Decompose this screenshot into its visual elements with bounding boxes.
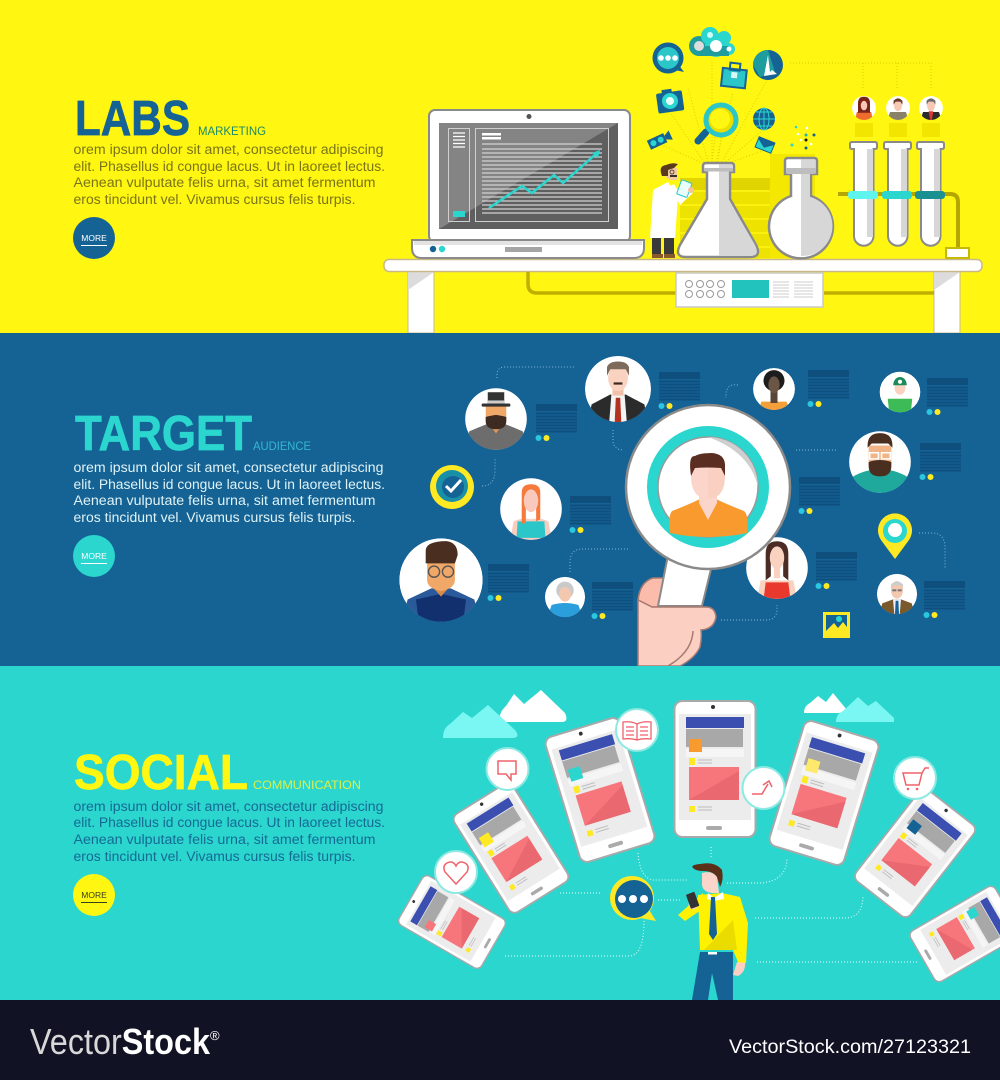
panel: target [0,333,1000,666]
icon: magnifier [698,105,736,141]
scientist [650,163,694,258]
icon: cloud [689,27,735,57]
clouds left [443,690,566,738]
text block: social body: orem ipsum dolor sit amet, consectetur adipiscing [74,799,384,814]
test tube: middle [882,142,912,246]
device under table [528,272,934,307]
icon: chat bubble [652,42,684,74]
avatar: lab suit man [919,96,943,120]
text block: target body: orem ipsum dolor sit amet, consectetur adipiscing [74,460,384,475]
dotted connectors [482,367,945,620]
registered mark: ® [210,1028,220,1043]
icon: globe [753,108,775,130]
dotted connectors [505,847,917,962]
dotted lines above avatars [790,63,931,88]
icon: compass [753,50,783,80]
avatar: red hair woman [500,478,562,540]
back finger [638,578,664,607]
text block: target body: Aenean vulputate felis urna, sit amet fermentum [74,493,376,508]
line chart: rising trend [489,153,597,208]
phone: centre [674,701,756,837]
logo: VectorStock: VectorStock [30,1021,211,1062]
icon: image [823,612,850,638]
icon: check badge [430,465,474,509]
conical flask [678,163,758,257]
collar [707,892,724,901]
phone: mid left [544,716,656,864]
panel: labs [0,0,1000,333]
pipe to test tubes [838,194,969,258]
text block: labs body: elit. Phasellus id congue lacus. Ut in laoreet lectus. [74,159,385,174]
info blocks [488,370,968,619]
avatar: woman in red [746,537,808,599]
panel background: yellow [0,0,1000,333]
tie [709,897,717,940]
button: more: MORE [81,890,107,900]
heading: LABS: LABS [75,92,190,146]
clouds right [804,693,894,722]
text block: social body [74,799,385,864]
trousers [692,952,733,1000]
avatar: lab man [886,96,910,120]
shirt [698,893,748,963]
businessman [678,863,748,1000]
heading: TARGET: TARGET [75,407,252,461]
thumb crease [668,631,693,666]
sparkle dots [790,126,816,150]
phone: far left [397,874,507,970]
text block: labs body: Aenean vulputate felis urna, sit amet fermentum [74,175,376,190]
subheading: communication: COMMUNICATION [253,778,361,792]
button: more: MORE [81,551,107,561]
test tube: right [915,142,945,246]
icon badge: book [616,709,658,751]
label shadows under avatars [855,123,940,137]
icon badge: comment [486,748,528,790]
avatar: bearded man with glasses [849,431,911,493]
panel background: blue [0,333,1000,666]
icon: envelope [754,136,776,154]
text block: labs body: orem ipsum dolor sit amet, consectetur adipiscing [74,142,384,157]
background stack behind flasks [680,154,815,258]
magnifier handle [658,555,712,606]
neck and face [702,872,719,893]
right hand [733,962,745,976]
test tube: left [848,142,878,246]
avatar: green cap [880,372,920,412]
button: more [73,874,115,916]
hair [692,863,723,887]
icon: map pin [878,513,912,559]
subheading: marketing: MARKETING [198,124,266,138]
avatar: old man [877,574,917,614]
subheading: audience: AUDIENCE [253,439,311,453]
button: more [73,217,115,259]
avatar: man in hat [465,388,527,450]
heading: SOCIAL: SOCIAL [74,746,248,800]
dotted rays [660,60,767,162]
text block: target body: elit. Phasellus id congue lacus. Ut in laoreet lectus. [74,477,385,492]
table [384,260,982,333]
button: more: MORE [81,233,107,243]
speech bubble [610,876,656,921]
image id: VectorStock.com/27123321 [729,1037,971,1058]
text block: social body: eros tincidunt vel. Vivamus cursus felis turpis. [74,849,356,864]
phone: far right [908,884,1000,984]
icon badge: cart [894,757,936,799]
icon: camera [655,87,684,114]
icon: briefcase [720,62,748,89]
avatar: afro woman [753,368,795,410]
hand [638,600,716,666]
magnifier with hand [626,405,790,666]
icon badge: heart [435,851,477,893]
text block: social body: elit. Phasellus id congue lacus. Ut in laoreet lectus. [74,815,385,830]
avatar: man in suit [585,356,651,422]
avatar: big man with glasses [399,538,483,622]
icon: video camera [647,131,673,150]
text block: target body [74,460,385,525]
avatar: lab woman [852,96,876,120]
avatar: old lady [545,577,585,617]
panel: social [0,666,1000,1000]
button: more [73,535,115,577]
text block: target body: eros tincidunt vel. Vivamus cursus felis turpis. [74,510,356,525]
panel background: teal [0,666,1000,1000]
laptop [412,110,644,258]
text block: social body: Aenean vulputate felis urna, sit amet fermentum [74,832,376,847]
round flask [769,158,833,258]
text block: labs body [74,142,385,207]
centre portrait [669,453,748,537]
text block: labs body: eros tincidunt vel. Vivamus cursus felis turpis. [74,192,356,207]
phone: right [852,786,978,920]
icon badge: share arrow [742,767,784,809]
phone: mid right [768,719,880,867]
left hand and phone [688,900,698,910]
phone: left [451,781,571,915]
footer bar [0,1000,1000,1080]
